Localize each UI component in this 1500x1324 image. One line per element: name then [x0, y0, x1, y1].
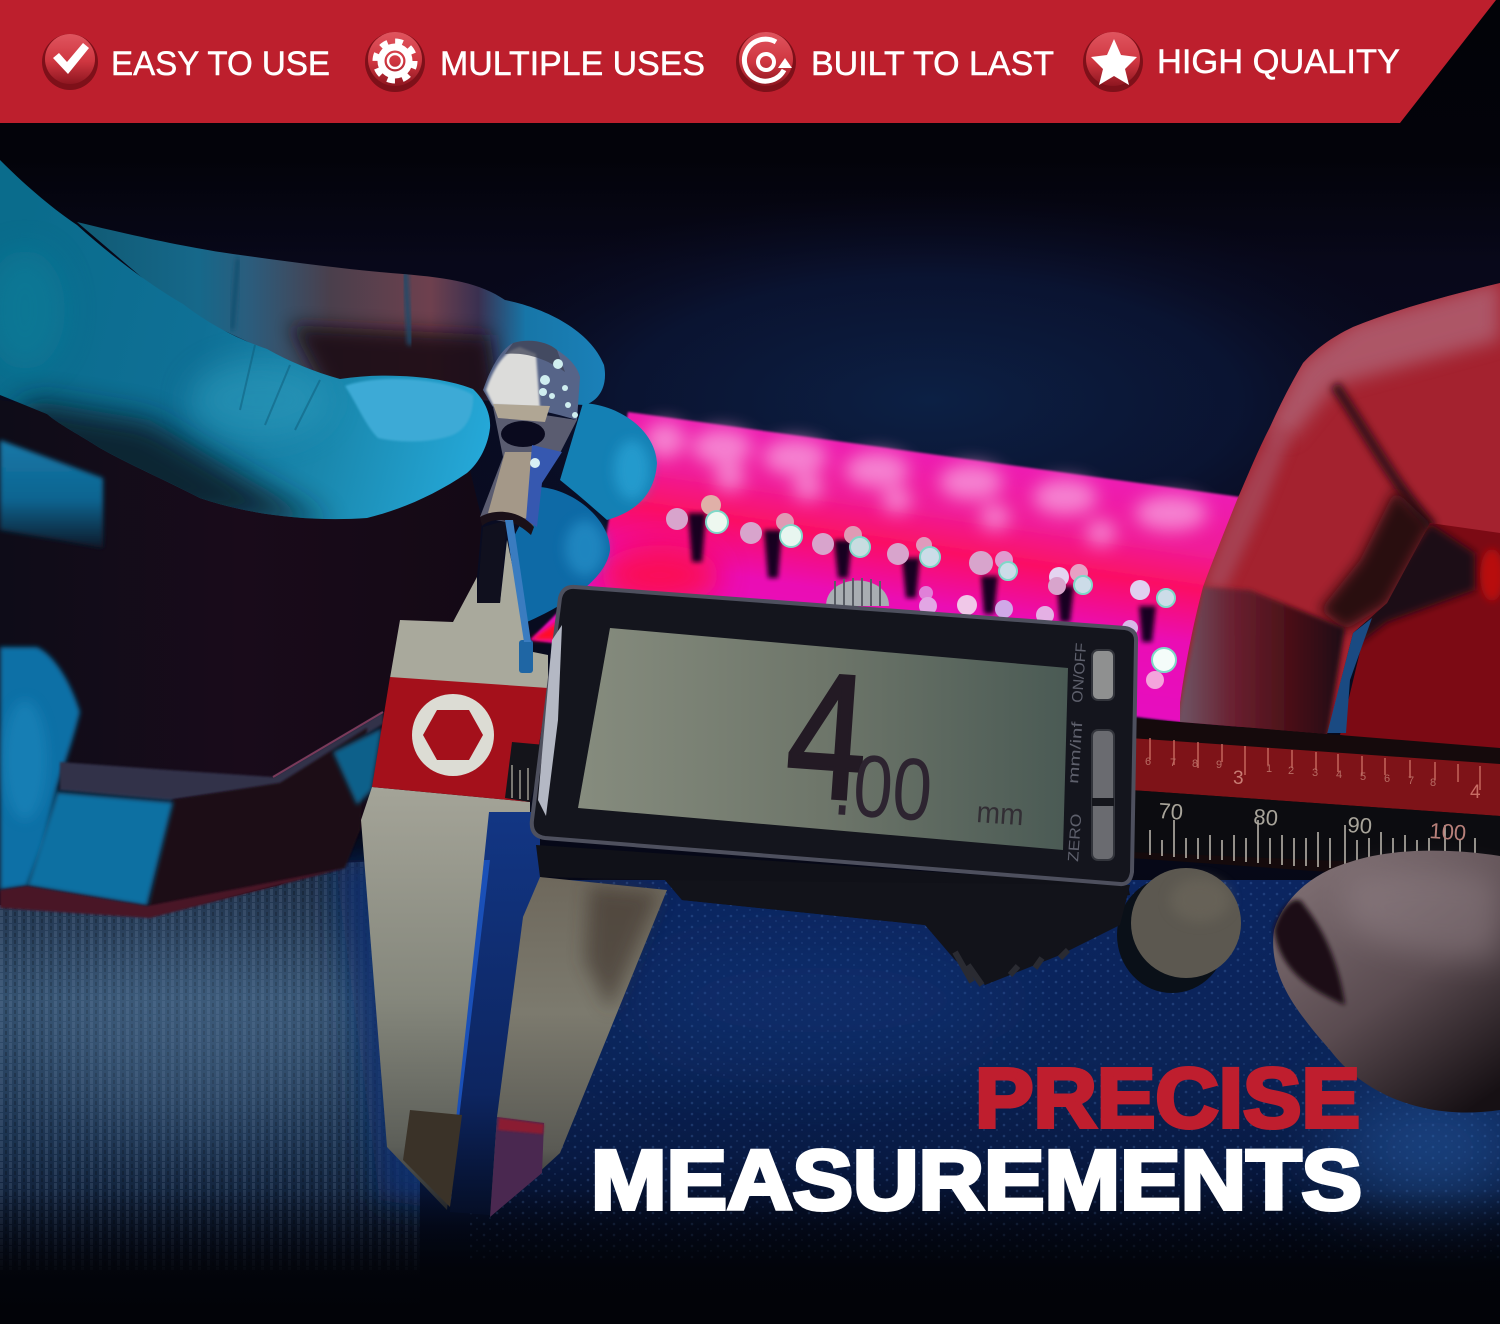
feature: built to last	[736, 32, 1054, 92]
headline	[591, 1051, 1362, 1227]
socket bright dots	[706, 511, 1176, 672]
caliper rule: 5	[1360, 771, 1366, 783]
display body	[532, 587, 1136, 884]
pale top skin	[1265, 280, 1500, 440]
thumbnail crease	[1274, 900, 1345, 1005]
thumb	[0, 160, 490, 519]
lower segment	[1175, 587, 1345, 740]
head ring	[493, 404, 550, 422]
caliper rule	[1130, 718, 1500, 884]
finger shading	[1175, 280, 1500, 740]
sockets in tray	[666, 495, 1176, 689]
blue pin	[519, 640, 533, 673]
icon: cycle badge	[736, 32, 796, 92]
rim	[480, 512, 534, 535]
dark crease band	[1350, 523, 1475, 650]
pink socket tray	[530, 412, 1240, 730]
finger highlight	[3, 700, 47, 820]
thumb wheel	[1117, 868, 1241, 993]
caliper rule: 90	[1347, 812, 1373, 839]
button labels: ZERO	[1065, 813, 1085, 862]
caliper rule: 7	[1408, 775, 1414, 787]
icon: check badge	[42, 34, 98, 90]
red label band	[372, 677, 548, 802]
hexagon ring icon	[412, 694, 494, 776]
caliper rule: 8	[1192, 758, 1198, 770]
lower left finger	[0, 647, 80, 890]
red lower edge	[0, 868, 345, 918]
blue square finger	[27, 792, 173, 906]
left fabric	[0, 860, 470, 1324]
socket opening	[501, 421, 545, 447]
blue edge light	[1327, 618, 1372, 733]
socket rear dots	[666, 495, 1164, 689]
jaw notch	[477, 520, 507, 603]
caliper jaws	[361, 520, 667, 1217]
wrist light	[333, 728, 382, 805]
fingertip lower	[512, 487, 610, 622]
upper blue palm	[0, 440, 103, 548]
label: MULTIPLE USES	[440, 45, 705, 83]
socket stems	[688, 513, 1156, 642]
left hand	[0, 160, 657, 918]
lower body	[536, 845, 1130, 925]
floor fade	[0, 1190, 1500, 1324]
socket head	[483, 341, 580, 420]
fingertip upper highlight	[614, 440, 650, 500]
index finger shading	[232, 258, 500, 410]
right hand	[1175, 280, 1500, 760]
jaw cutouts	[403, 1110, 462, 1207]
black mm scale	[1130, 790, 1500, 868]
shaft blue edge	[526, 445, 562, 527]
grey band	[60, 712, 383, 800]
lower right thumb	[1273, 851, 1500, 1113]
left skin edge	[1203, 427, 1290, 590]
slot edge highlight	[448, 860, 490, 1200]
moving jaw shadow	[585, 885, 660, 1010]
socket neck	[480, 407, 577, 527]
label: BUILT TO LAST	[811, 45, 1054, 83]
digital display	[532, 578, 1136, 985]
scale window	[505, 742, 545, 802]
knurled teeth	[955, 950, 1068, 985]
rule numbers: 70	[1158, 798, 1184, 825]
shaft	[488, 452, 545, 520]
caliper rule: 6	[1384, 773, 1390, 785]
headline word: measurements: MEASUREMENTS	[591, 1133, 1362, 1227]
upper jaw	[390, 540, 548, 690]
unit: mm	[976, 796, 1025, 832]
caliper rule: 3	[1233, 768, 1244, 789]
caliper rule: 3	[1312, 767, 1318, 779]
silver left edge	[538, 625, 562, 816]
header banner	[0, 0, 1496, 123]
icon: star badge	[1083, 32, 1143, 92]
socket in fingers	[480, 341, 580, 642]
tray hexagon highlights	[645, 422, 1207, 546]
upper knuckle fold	[1335, 385, 1432, 528]
shadow under fold	[1320, 490, 1432, 630]
main digit 4: 4	[776, 640, 877, 856]
thumbnail	[345, 379, 473, 442]
feature: easy to use	[42, 34, 330, 90]
blue slot	[450, 812, 540, 1215]
caliper rule: 2	[1288, 765, 1294, 777]
feature: high quality	[1083, 32, 1400, 92]
right fabric	[420, 880, 1500, 1324]
head bright side	[486, 347, 540, 408]
shaft glint	[530, 458, 540, 468]
caliper rule: 80	[1253, 804, 1279, 831]
red ticks	[1150, 738, 1480, 790]
dark palm	[0, 400, 482, 916]
buttons	[1092, 650, 1114, 860]
caliper rule: 100	[1429, 818, 1467, 846]
thumb shading	[0, 250, 330, 525]
decimal digits: .00	[831, 734, 935, 840]
button labels	[1065, 642, 1090, 862]
band pink edge	[273, 712, 383, 777]
label: HIGH QUALITY	[1157, 43, 1400, 81]
button labels: ON/OFF	[1069, 642, 1090, 703]
button labels: mm/inf	[1065, 720, 1086, 784]
fingertip upper	[560, 403, 657, 520]
fingertip lower highlight	[565, 520, 605, 576]
bracket	[665, 880, 1130, 985]
second finger	[1340, 520, 1500, 760]
knurled knob	[826, 578, 889, 606]
caliper rule: 7	[1170, 757, 1176, 769]
tray red glow	[600, 545, 720, 605]
caliper rule: 1	[1266, 763, 1272, 775]
caliper blade	[505, 520, 531, 642]
red scale	[1130, 738, 1500, 816]
caliper rule: 8	[1430, 777, 1436, 789]
head reflections	[539, 359, 578, 418]
head top band	[505, 341, 565, 372]
lower red knuckle	[147, 728, 367, 916]
caliper rule: 9	[1216, 759, 1222, 771]
caliper rule: 6	[1145, 756, 1151, 768]
lower fixed jaw	[361, 787, 530, 1210]
LCD screen	[578, 628, 1068, 850]
index finger	[77, 222, 605, 405]
moving jaw	[490, 877, 667, 1217]
bright knuckle	[1480, 549, 1500, 601]
label: EASY TO USE	[111, 45, 330, 83]
caliper rule: 4	[1470, 782, 1481, 803]
mm ticks	[1150, 820, 1475, 878]
main finger	[1180, 283, 1500, 734]
icon: gear badge	[365, 32, 425, 92]
headline word: precise: PRECISE	[975, 1051, 1360, 1145]
feature: multiple uses	[365, 32, 705, 92]
caliper rule: 4	[1336, 769, 1342, 781]
thumb highlight	[1345, 869, 1500, 960]
